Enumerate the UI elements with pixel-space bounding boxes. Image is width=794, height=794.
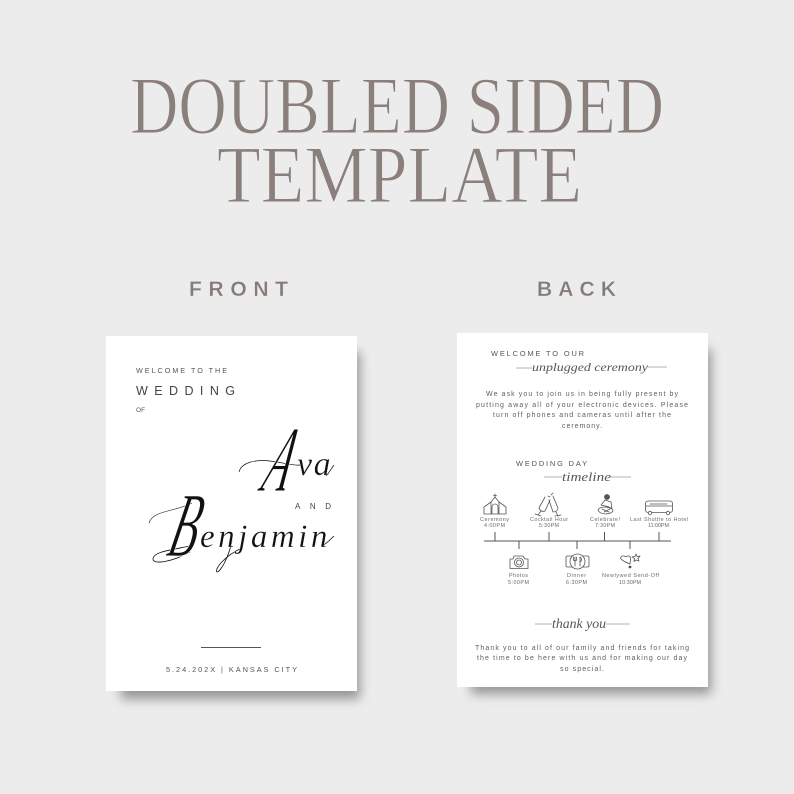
icon: heart and stars — [621, 554, 640, 568]
panel: back card — [457, 333, 711, 694]
text: unplugged message: turn off phones and cameras until after the — [493, 412, 671, 419]
heading: unplugged ceremony: WELCOME TO OUR — [491, 349, 584, 358]
text: thank you message: Thank you to all of our family and friends for taking — [475, 645, 689, 652]
label: ceremony: Ceremony — [480, 517, 509, 523]
label: cocktail hour — [530, 517, 568, 529]
label: photos: Photos — [509, 573, 528, 579]
heading: thank you — [535, 617, 630, 632]
label: celebrate: 7:30PM — [595, 523, 616, 529]
text: thank you message: the time to be here with us and for making our day — [477, 655, 688, 662]
label: cocktail hour: 5:30PM — [539, 523, 560, 529]
label: photos — [508, 573, 530, 586]
heading: unplugged ceremony — [491, 349, 667, 374]
divider line — [201, 647, 261, 648]
label: last shuttle: Last Shuttle to Hotel — [630, 517, 688, 523]
panel: front card — [106, 336, 360, 699]
label: celebrate — [590, 517, 620, 529]
title — [130, 60, 664, 220]
icon: dinner plate — [566, 554, 589, 569]
icon: celebrate dancers — [598, 494, 613, 514]
label: dinner: Dinner — [567, 573, 586, 579]
welcome text: WELCOME TO THE — [136, 366, 227, 375]
name: Ava: va — [297, 446, 332, 483]
text: thank you message — [475, 645, 689, 673]
label: dinner — [566, 573, 588, 586]
text: unplugged message: putting away all of your electronic devices. Please — [476, 402, 688, 409]
heading: thank you: thank you — [552, 617, 606, 632]
name: Ava — [239, 408, 334, 512]
heading: back: BACK — [537, 278, 616, 301]
and label: AND — [295, 502, 331, 511]
wedding heading: WEDDING — [136, 384, 235, 398]
icon: camera — [510, 556, 528, 568]
heading: wedding day timeline: WEDDING DAY — [516, 459, 587, 468]
heading: wedding day timeline: timeline — [562, 469, 611, 484]
timeline chart — [480, 493, 688, 586]
text: unplugged message: ceremony. — [562, 423, 602, 430]
text: unplugged message — [476, 391, 688, 430]
text: unplugged message: We ask you to join us in being fully present by — [486, 391, 678, 398]
name: Ava: A — [249, 408, 313, 512]
label: ceremony: 4:00PM — [484, 523, 506, 529]
text: thank you message: so special. — [560, 666, 604, 673]
title: DOUBLED SIDED — [130, 60, 664, 151]
name: Benjamin: enjamin — [200, 519, 331, 555]
name: Benjamin: B — [160, 476, 213, 577]
label: newlywed send-off: Newlywed Send-Off — [602, 573, 660, 579]
label: last shuttle — [630, 517, 688, 529]
label: newlywed send-off — [602, 573, 660, 586]
of label: OF — [136, 407, 145, 414]
label: celebrate: Celebrate! — [590, 517, 620, 523]
timeline axis — [484, 532, 671, 549]
label: dinner: 6:30PM — [566, 580, 588, 586]
label: ceremony — [480, 517, 509, 529]
heading: front: FRONT — [189, 278, 288, 301]
label: newlywed send-off: 10:30PM — [619, 580, 642, 586]
label: photos: 5:00PM — [508, 580, 530, 586]
title: TEMPLATE — [217, 129, 582, 220]
heading: wedding day timeline — [516, 459, 631, 484]
icon: champagne glasses — [535, 493, 561, 516]
label: last shuttle: 11:00PM — [648, 523, 670, 529]
icon: shuttle bus — [646, 501, 672, 515]
icon: church — [484, 494, 506, 514]
label: cocktail hour: Cocktail Hour — [530, 517, 568, 523]
date and place: 5.24.202X | KANSAS CITY — [166, 665, 297, 674]
heading: unplugged ceremony: unplugged ceremony — [532, 360, 649, 374]
name: Benjamin — [149, 476, 334, 577]
